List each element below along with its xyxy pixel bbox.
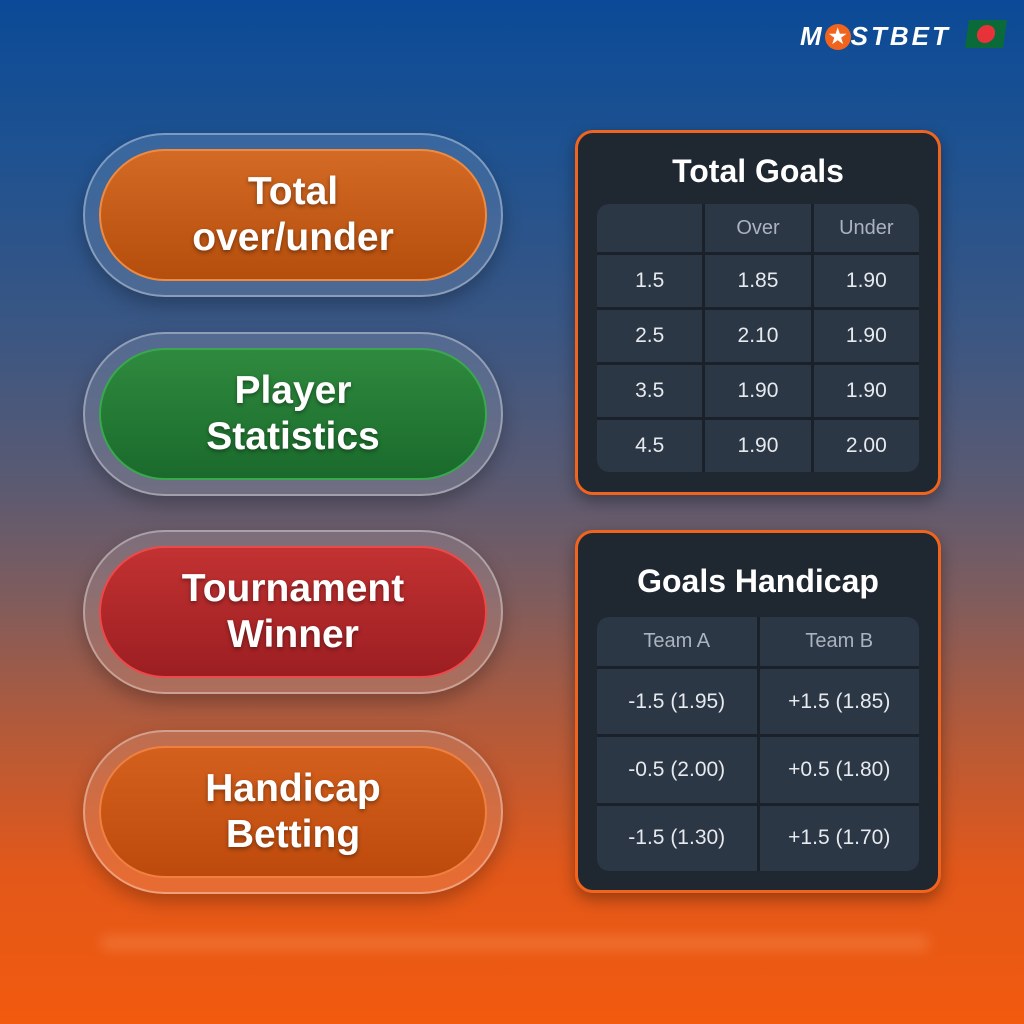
table: handicap odds: -0.5 (2.00) bbox=[628, 758, 725, 781]
table: handicap odds: +0.5 (1.80) bbox=[788, 758, 890, 781]
panel: Goals Handicap bbox=[575, 530, 941, 893]
table: total goals odds: 1.90 bbox=[846, 324, 887, 347]
table: handicap odds: +1.5 (1.70) bbox=[788, 826, 890, 849]
pill: Handicap Betting bbox=[83, 730, 503, 894]
pill: Total over/under: Total bbox=[248, 170, 338, 213]
table: total goals odds: 2.10 bbox=[738, 324, 778, 347]
heading: Total Goals: Total Goals bbox=[672, 153, 844, 189]
table: total goals odds: Under bbox=[839, 216, 894, 238]
pill: Tournament Winner bbox=[83, 530, 503, 694]
heading: Goals Handicap: Goals Handicap bbox=[637, 563, 879, 599]
table: handicap odds: Team A bbox=[643, 630, 710, 652]
table: total goals odds: 4.5 bbox=[635, 434, 664, 457]
table: total goals odds bbox=[597, 204, 919, 472]
pill: Player Statistics: Statistics bbox=[206, 415, 380, 458]
panel: Total Goals bbox=[575, 130, 941, 495]
table: handicap odds: +1.5 (1.85) bbox=[788, 690, 890, 713]
pill: Tournament Winner: Tournament bbox=[182, 567, 404, 610]
table: total goals odds: 1.90 bbox=[738, 379, 778, 402]
pill: Handicap Betting: Handicap bbox=[205, 767, 381, 810]
table: total goals odds: 1.90 bbox=[846, 379, 887, 402]
logo: M STBET bbox=[800, 21, 951, 51]
table: handicap odds: -1.5 (1.95) bbox=[628, 690, 725, 713]
table: total goals odds: 1.90 bbox=[738, 434, 778, 457]
table: total goals odds: 1.5 bbox=[635, 269, 664, 292]
table: handicap odds: Team B bbox=[805, 630, 873, 652]
pill: Total over/under bbox=[83, 133, 503, 297]
table: handicap odds bbox=[597, 617, 919, 871]
pill: Handicap Betting: Betting bbox=[226, 813, 360, 856]
pill: Total over/under: over/under bbox=[192, 216, 394, 259]
logo: ★ bbox=[829, 26, 847, 48]
table: handicap odds: -1.5 (1.30) bbox=[628, 826, 725, 849]
table: total goals odds: 2.5 bbox=[635, 324, 664, 347]
pill: Tournament Winner: Winner bbox=[227, 613, 359, 656]
table: total goals odds: 1.90 bbox=[846, 269, 887, 292]
table: total goals odds: 3.5 bbox=[635, 379, 664, 402]
pill: Player Statistics: Player bbox=[234, 369, 352, 412]
table: total goals odds: 1.85 bbox=[738, 269, 778, 292]
pill: Player Statistics bbox=[83, 332, 503, 496]
glow band bbox=[100, 935, 930, 951]
table: total goals odds: Over bbox=[736, 216, 780, 238]
table: total goals odds: 2.00 bbox=[846, 434, 887, 457]
